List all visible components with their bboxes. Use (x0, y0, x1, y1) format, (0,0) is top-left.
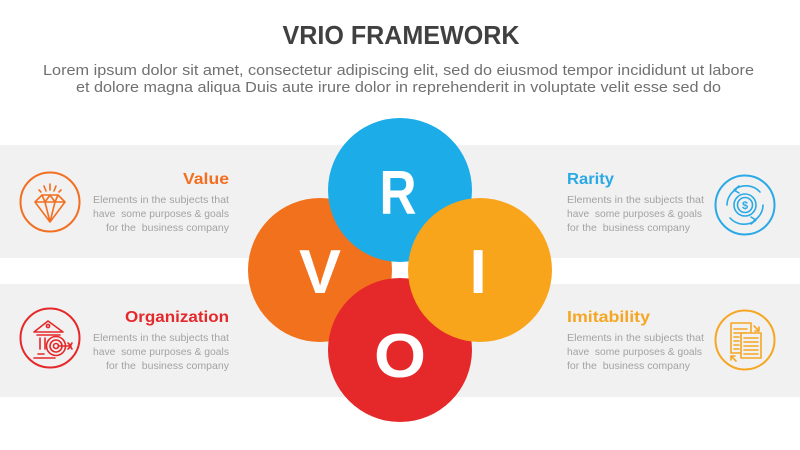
text block: rarity (567, 194, 704, 234)
circle: I (408, 198, 552, 342)
text block: rarity: for the business company (567, 222, 691, 234)
text block: rarity: have some purposes & goals (567, 208, 702, 220)
text block: imitability: for the business company (567, 360, 691, 372)
text block: value (93, 194, 230, 234)
subtitle text: Lorem ipsum dolor sit amet, consectetur adipiscing elit, sed do eiusmod tempor incididunt ut labore (43, 63, 754, 79)
circle: R (328, 118, 472, 262)
heading: organization: Organization (125, 309, 229, 326)
subtitle text (43, 63, 754, 96)
circle: V (248, 198, 392, 342)
text block: organization: have some purposes & goals (93, 346, 229, 358)
icon: copied documents (716, 310, 774, 370)
text block: organization: for the business company (106, 360, 230, 372)
letter: O: O (374, 322, 426, 391)
panel: imitability (567, 309, 774, 372)
text block: value: Elements in the subjects that (93, 194, 229, 206)
panel: value (20, 171, 230, 234)
panel: rarity (567, 171, 774, 234)
text block: value: for the business company (106, 222, 230, 234)
icon: diamond (20, 172, 80, 232)
letter: I: I (470, 238, 487, 307)
letter: R: R (380, 159, 416, 228)
panel: bottom band (0, 284, 800, 397)
letter: V: V (299, 238, 341, 307)
text block: imitability: Elements in the subjects that (567, 332, 704, 344)
heading: imitability: Imitability (567, 309, 650, 326)
heading: value: Value (183, 171, 229, 188)
circle: O (328, 278, 472, 422)
panel: organization (20, 308, 230, 372)
icon: dollar sign: $ (742, 200, 748, 212)
text block: organization: Elements in the subjects that (93, 332, 229, 344)
text block: rarity: Elements in the subjects that (567, 194, 704, 206)
text block: organization (93, 332, 230, 372)
icon: bank with target (20, 308, 80, 368)
icon: rotating coin (716, 176, 774, 234)
text block: imitability: have some purposes & goals (567, 346, 702, 358)
heading: rarity: Rarity (567, 171, 614, 188)
panel: top band (0, 145, 800, 258)
text block: imitability (567, 332, 704, 372)
title: VRIO FRAMEWORK (282, 20, 520, 50)
text block: value: have some purposes & goals (93, 208, 229, 220)
subtitle text: et dolore magna aliqua Duis aute irure dolor in reprehenderit in voluptate velit esse sed do (76, 80, 721, 96)
